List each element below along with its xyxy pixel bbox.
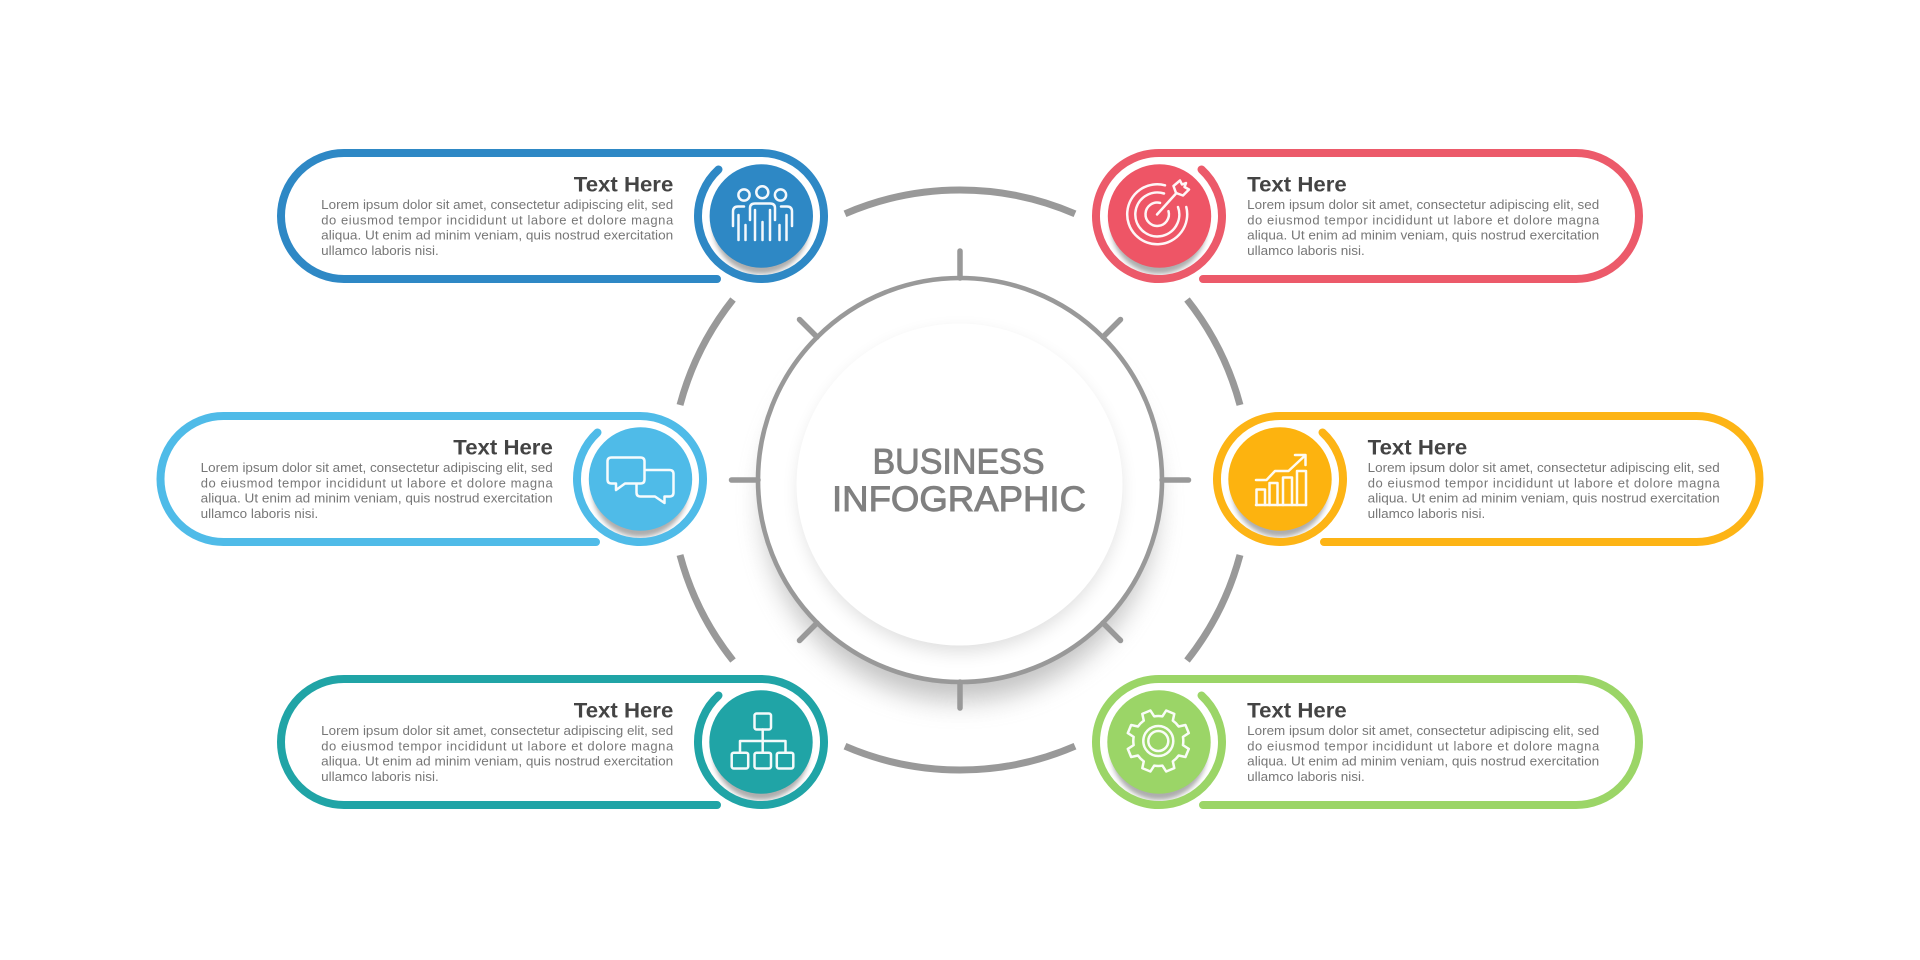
card body text: do eiusmod tempor incididunt ut labore et dolore magna [1368,476,1720,491]
card body text [1247,197,1600,258]
card outline [1096,153,1639,279]
card body text: aliqua. Ut enim ad minim veniam, quis nostrud exercitation [321,228,673,243]
hub outer shadow [764,309,1156,701]
card heading: Text Here [574,699,673,723]
card body text [1247,723,1600,784]
icon disc [710,164,813,268]
hub ring [758,278,1162,682]
card body text: ullamco laboris nisi. [1368,506,1485,521]
card body text: ullamco laboris nisi. [321,769,439,784]
icon: org chart [732,714,793,768]
center title: INFOGRAPHIC [832,480,1086,519]
card body text: do eiusmod tempor incididunt ut labore et dolore magna [321,213,674,228]
icon disc [1108,164,1211,268]
card body text: aliqua. Ut enim ad minim veniam, quis nostrud exercitation [1368,491,1720,506]
card body text: Lorem ipsum dolor sit amet, consectetur adipiscing elit, sed [201,460,553,475]
icon disc [709,690,813,794]
card body text: do eiusmod tempor incididunt ut labore et dolore magna [321,739,674,754]
hub inner disc [796,324,1122,646]
card heading: Text Here [453,436,553,460]
icon shadow [592,441,688,537]
icon shadow [713,178,809,274]
card outline [281,679,824,805]
card heading: Text Here [1247,173,1347,197]
card heading: Text Here [1247,699,1347,723]
outer arc segments [680,190,1240,770]
panel: teal hierarchy card [281,679,824,805]
panel: red target card [1096,153,1639,279]
icon shadow [713,704,809,800]
card body text: Lorem ipsum dolor sit amet, consectetur adipiscing elit, sed [1368,460,1720,475]
icon: chat bubbles [608,458,674,503]
icon: target [1127,180,1189,244]
center title [832,443,1086,519]
card body text [201,460,553,521]
card body text: do eiusmod tempor incididunt ut labore et dolore magna [1247,213,1600,228]
card outline [1217,416,1760,542]
hub inner disc shadow [800,332,1120,652]
card body text: Lorem ipsum dolor sit amet, consectetur adipiscing elit, sed [1247,723,1599,738]
panel: blue team card [281,153,824,279]
card body text: do eiusmod tempor incididunt ut labore et dolore magna [201,476,553,491]
central hub [758,278,1162,701]
card outline [161,416,703,542]
card body text: ullamco laboris nisi. [1247,769,1365,784]
card outline [281,153,824,279]
panel: yellow chart card [1217,416,1760,542]
card heading: Text Here [574,173,673,197]
card heading: Text Here [1368,436,1467,460]
icon: growth chart [1256,455,1306,505]
card body text: aliqua. Ut enim ad minim veniam, quis nostrud exercitation [321,754,673,769]
hub tick marks [732,251,1188,708]
card body text: Lorem ipsum dolor sit amet, consectetur adipiscing elit, sed [1247,197,1599,212]
center title: BUSINESS [872,443,1044,482]
panel: green gear card [1096,679,1639,805]
icon shadow [1111,178,1207,274]
icon disc [589,427,692,531]
icon disc [1107,690,1211,794]
card body text: aliqua. Ut enim ad minim veniam, quis nostrud exercitation [201,491,553,506]
card body text: do eiusmod tempor incididunt ut labore et dolore magna [1247,739,1600,754]
card body text: ullamco laboris nisi. [201,506,318,521]
icon: people [733,186,792,240]
panel: light blue chat card [161,416,703,542]
card body text [1368,460,1720,521]
card body text: ullamco laboris nisi. [1247,243,1365,258]
card body text: aliqua. Ut enim ad minim veniam, quis nostrud exercitation [1247,754,1599,769]
card body text: ullamco laboris nisi. [321,243,439,258]
icon shadow [1111,704,1207,800]
card outline [1096,679,1639,805]
card body text [321,723,674,784]
card body text: Lorem ipsum dolor sit amet, consectetur adipiscing elit, sed [321,197,673,212]
card body text: Lorem ipsum dolor sit amet, consectetur adipiscing elit, sed [321,723,673,738]
icon disc [1228,427,1332,531]
card body text: aliqua. Ut enim ad minim veniam, quis nostrud exercitation [1247,228,1599,243]
card body text [321,197,674,258]
icon shadow [1232,441,1328,537]
icon: gear [1128,710,1189,772]
